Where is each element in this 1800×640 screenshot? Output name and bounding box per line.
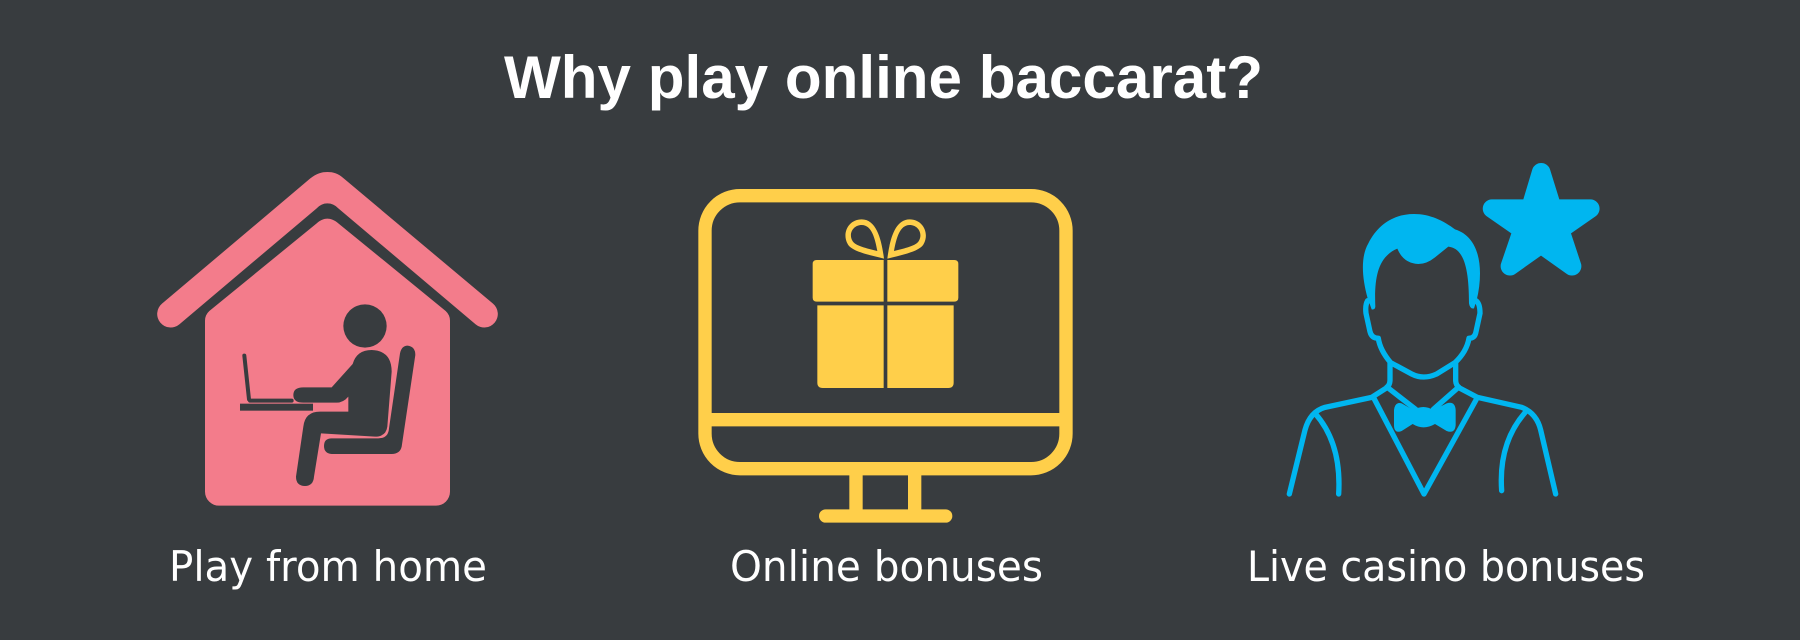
hair bbox=[1363, 214, 1480, 309]
icon: house with person at laptop bbox=[157, 172, 498, 506]
laptop bbox=[244, 356, 292, 401]
panel: play from home bbox=[157, 172, 498, 591]
monitor frame bbox=[705, 196, 1066, 516]
panel: live casino bonuses bbox=[1247, 163, 1645, 591]
panel: online bonuses bbox=[705, 196, 1066, 591]
label: online bonuses: Online bonuses bbox=[730, 542, 1043, 591]
gift lid bbox=[813, 260, 958, 302]
label: live casino bonuses: Live casino bonuses bbox=[1247, 542, 1645, 591]
person head bbox=[343, 304, 387, 348]
house roof bbox=[157, 172, 498, 327]
icon: dealer with star bbox=[1289, 163, 1600, 494]
house body bbox=[205, 219, 450, 506]
label: play from home: Play from home bbox=[169, 542, 487, 591]
gift bow bbox=[845, 219, 926, 259]
dealer outline bbox=[1289, 301, 1556, 494]
person body bbox=[293, 350, 392, 486]
desk bbox=[240, 404, 313, 411]
chair bbox=[324, 346, 415, 454]
gift box bbox=[817, 305, 954, 388]
icon: monitor with gift bbox=[705, 196, 1066, 516]
title: Why play online baccarat? bbox=[504, 44, 1263, 111]
star bbox=[1483, 163, 1600, 276]
bow tie bbox=[1394, 403, 1456, 432]
